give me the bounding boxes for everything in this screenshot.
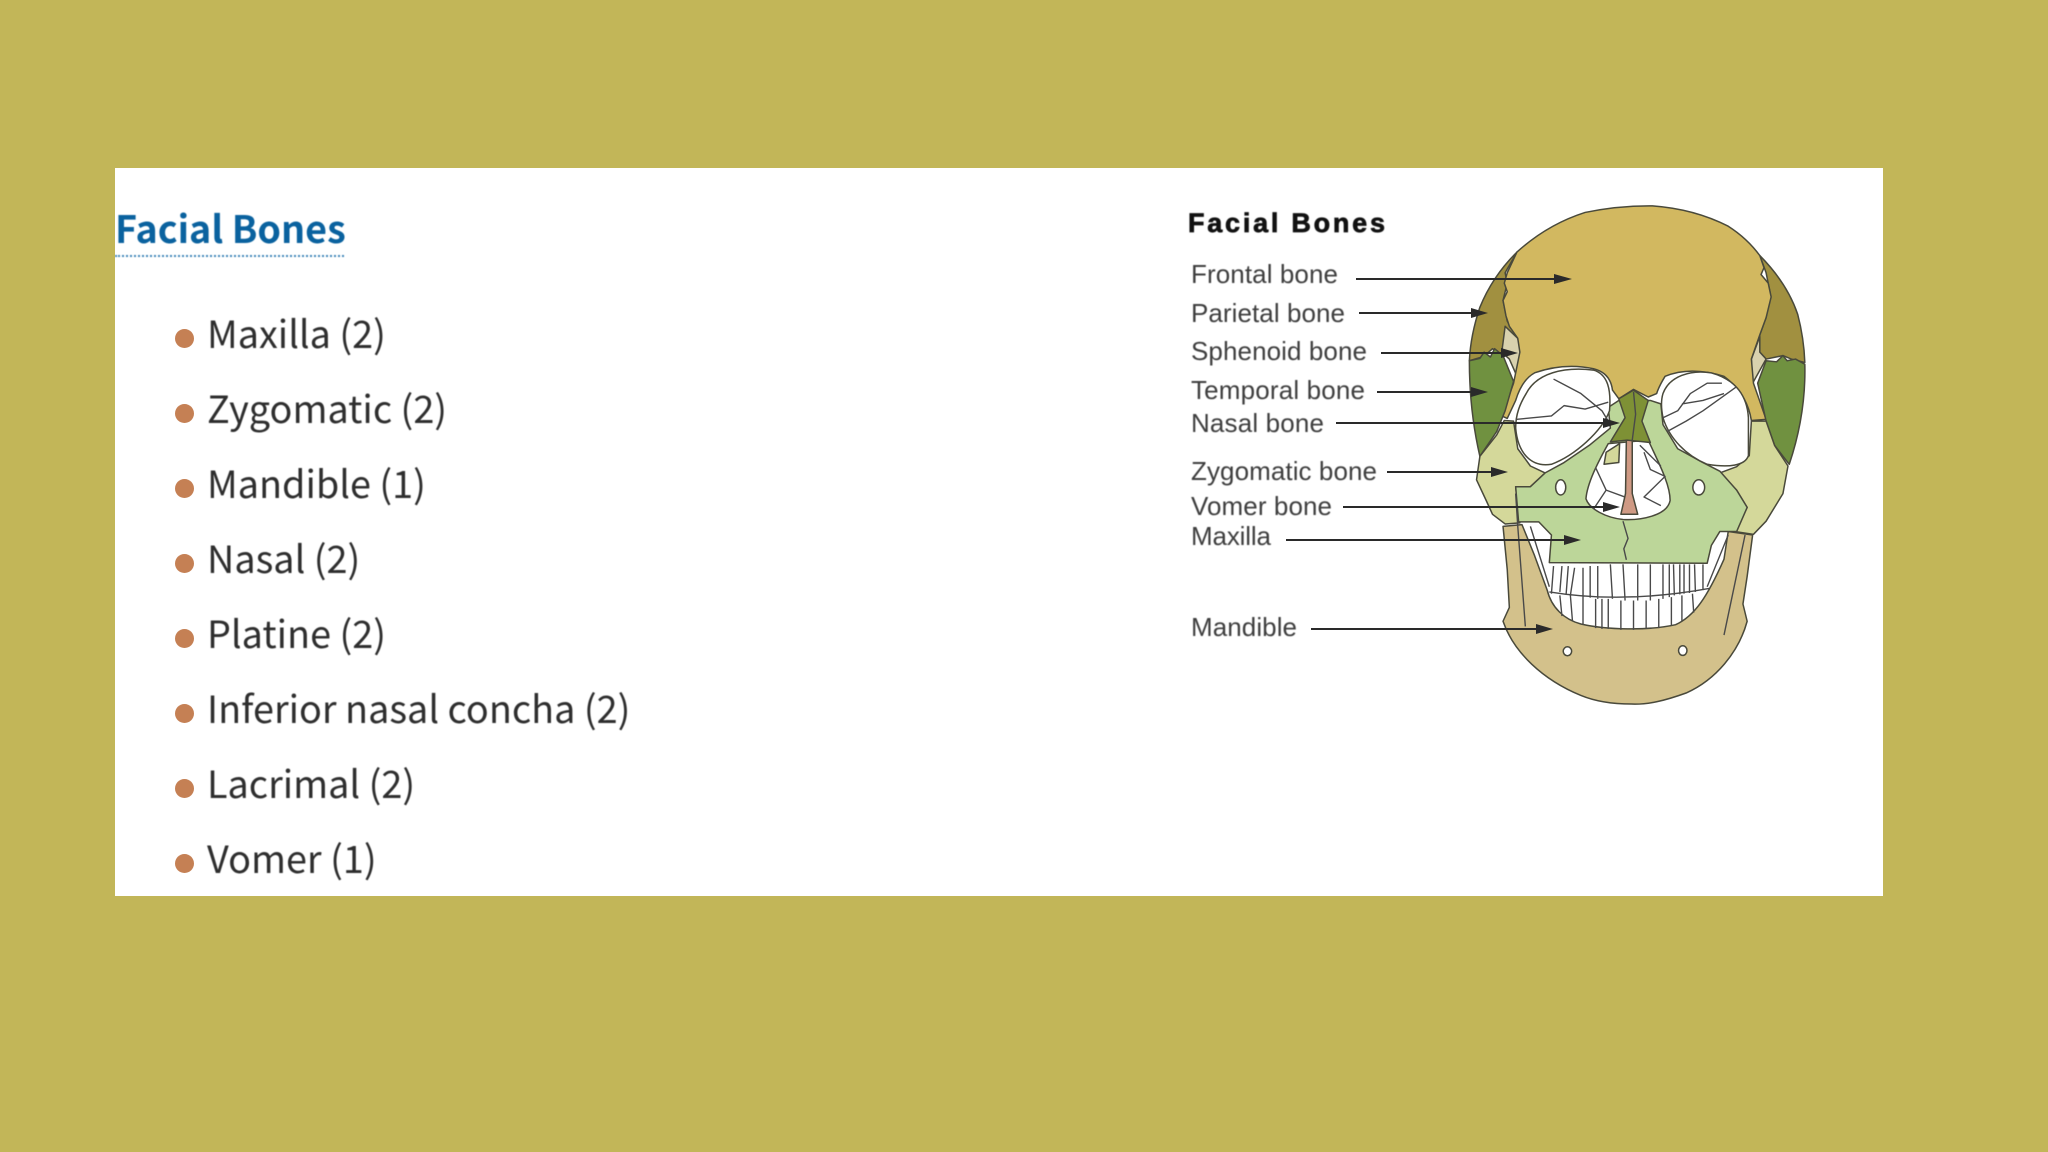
orbit fissures [1516, 379, 1737, 432]
nasal cavity lines [1594, 445, 1665, 509]
orbit: left [1516, 369, 1610, 465]
bone: maxilla [1516, 400, 1747, 563]
label: Zygomatic bone: Zygomatic bone [1191, 456, 1377, 486]
bone: temporal left [1469, 349, 1514, 456]
label: Frontal bone: Frontal bone [1191, 259, 1338, 289]
bone: temporal right [1758, 356, 1805, 464]
orbit: right [1661, 372, 1748, 466]
bone: sphenoid left [1502, 326, 1521, 378]
heading: Facial Bones: Facial Bones [115, 199, 346, 254]
mandible rami lines [1516, 494, 1745, 635]
list item: Mandible: Mandible (1) [207, 454, 426, 509]
list item: Vomer: Vomer (1) [207, 829, 377, 884]
bone: zygomatic right [1720, 421, 1788, 534]
list item: Lacrimal: Lacrimal (2) [207, 754, 415, 809]
list item: Platine: Platine (2) [207, 604, 386, 659]
label: Nasal bone: Nasal bone [1191, 408, 1324, 438]
list item: Maxilla: Maxilla (2) [207, 304, 386, 359]
foramina [1556, 480, 1566, 495]
nasal suture [1632, 392, 1636, 440]
label: Temporal bone: Temporal bone [1191, 375, 1365, 405]
arrow: Vomer bone [1343, 502, 1620, 512]
skull illustration [1469, 206, 1805, 704]
bone: zygomatic left [1477, 420, 1545, 524]
arrow: Mandible [1311, 624, 1553, 634]
bone: parietal right [1760, 256, 1805, 362]
lacrimal patch [1604, 444, 1620, 464]
mental foramen left [1563, 647, 1572, 656]
foramen right [1693, 480, 1705, 495]
arrow: Zygomatic bone [1387, 467, 1508, 477]
arrow: Parietal bone [1359, 308, 1488, 318]
label: Parietal bone: Parietal bone [1191, 298, 1345, 328]
list item: Nasal: Nasal (2) [207, 529, 360, 584]
mental foramen right [1679, 646, 1687, 655]
arrow: Maxilla [1286, 535, 1581, 545]
bone: sphenoid right [1751, 337, 1766, 383]
label: Sphenoid bone: Sphenoid bone [1191, 336, 1367, 366]
label: Mandible: Mandible [1191, 612, 1297, 642]
nasal aperture [1586, 440, 1670, 520]
arrow: Temporal bone [1377, 387, 1488, 397]
bone: nasal [1610, 390, 1650, 443]
list item: Zygomatic: Zygomatic (2) [207, 379, 447, 434]
arrow: Nasal bone [1336, 418, 1620, 428]
bone: frontal [1502, 206, 1771, 420]
bone: parietal left [1469, 252, 1522, 361]
bone: mandible [1503, 525, 1753, 704]
maxilla suture [1623, 521, 1628, 560]
list item: Inferior nasal concha: Inferior nasal concha (2) [207, 679, 630, 734]
arrow: Sphenoid bone [1381, 348, 1518, 358]
label: diagram title: Facial Bones [1188, 208, 1385, 238]
panel: facial bones card [115, 168, 1883, 896]
bone: vomer [1621, 440, 1638, 514]
label: Maxilla: Maxilla [1191, 521, 1272, 551]
label: Vomer bone: Vomer bone [1191, 491, 1332, 521]
upper and lower teeth [1549, 564, 1709, 630]
arrow: Frontal bone [1356, 274, 1572, 284]
